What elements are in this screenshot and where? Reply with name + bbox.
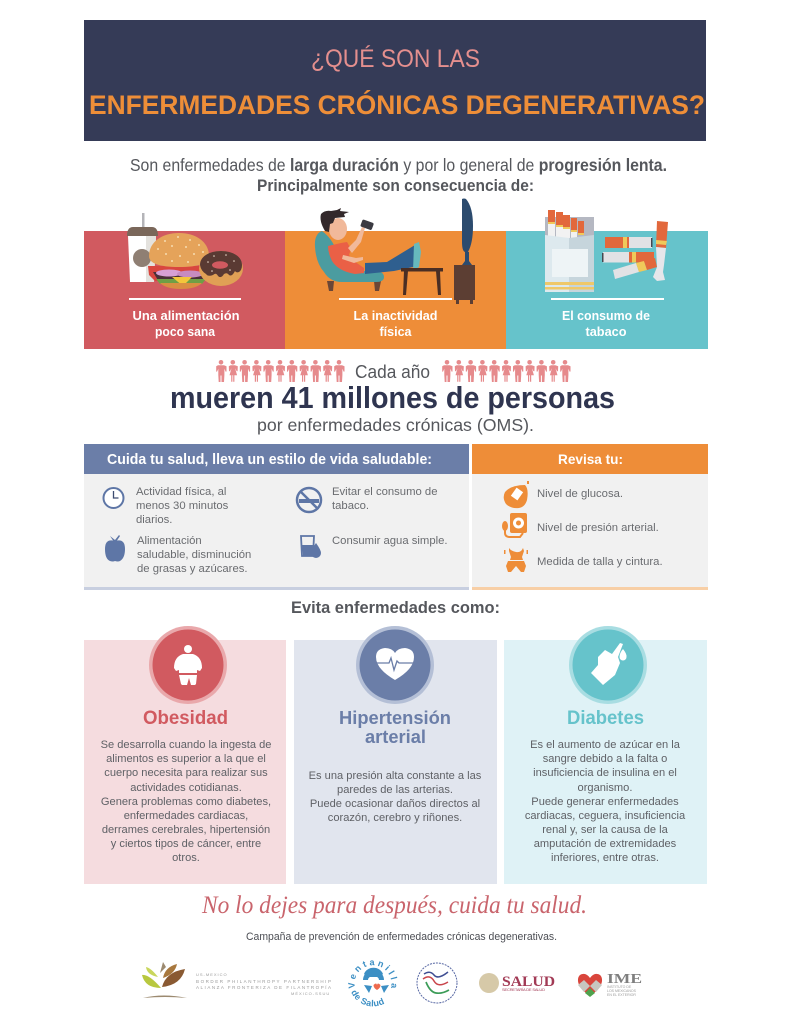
heading: avoid diseases: Evita enfermedades como: — [291, 599, 500, 617]
panel: hypertension — [294, 626, 497, 884]
campaign line: Campaña de prevención de enfermedades crónicas degenerativas. — [246, 931, 557, 943]
panel: check: Revisa tu: — [558, 451, 623, 467]
text: hypertension description: Es una presión alta constante a las — [309, 770, 482, 782]
icon: cigarettes — [545, 210, 668, 292]
text: obesity description: cuerpo necesita para realizar sus — [104, 767, 268, 779]
text: diabetes description: organismo. — [578, 782, 632, 794]
panel: hypertension: arterial — [365, 726, 426, 747]
text: waist: Medida de talla y cintura. — [537, 556, 663, 568]
text: obesity description: actividades cotidianas. — [130, 782, 242, 794]
intro text — [130, 155, 667, 195]
panel: inactivity: La inactividad — [354, 309, 438, 323]
icon: obese person — [149, 626, 227, 704]
text: physical activity: menos 30 minutos — [136, 500, 229, 512]
icon: water glass — [301, 536, 321, 558]
panel: diabetes — [504, 626, 707, 884]
logo: ventanilla de salud: de Salud — [352, 990, 384, 1006]
text: diabetes description: cardiacas, ceguera, insuficiencia — [525, 810, 686, 822]
icon: clock — [104, 488, 124, 508]
text: hypertension description: paredes de las arterias. — [337, 784, 453, 796]
intro text: Son enfermedades de larga duración y por lo general de progresión lenta. — [130, 155, 667, 175]
logo: IME: INSTITUTO DE — [607, 985, 632, 989]
icon: glucose meter — [504, 481, 529, 508]
text: physical activity — [136, 486, 229, 526]
text: diabetes description: insuficiencia de insulina en el — [533, 767, 677, 779]
text: obesity description: Genera problemas como diabetes, — [101, 796, 271, 808]
text: diabetes description: inferiores, entre otras. — [551, 852, 659, 864]
statistic: por enfermedades crónicas (OMS). — [257, 415, 534, 435]
panel: inactivity — [285, 198, 506, 349]
text: obesity description: Se desarrolla cuando la ingesta de — [101, 739, 271, 751]
text: healthy diet: Alimentación — [137, 535, 202, 547]
logo: ventanilla de salud: Ventanilla — [348, 960, 398, 989]
panel: unhealthy food: Una alimentación — [132, 309, 240, 323]
text: healthy diet: saludable, disminución — [137, 549, 251, 561]
logo: IME: EN EL EXTERIOR — [607, 993, 636, 997]
text: diabetes description: Es el aumento de azúcar en la — [530, 739, 681, 751]
text: obesity description: otros. — [172, 852, 200, 864]
slogan: No lo dejes para después, cuida tu salud. — [201, 892, 587, 919]
panel: unhealthy food: poco sana — [155, 325, 216, 339]
logo: border philanthropy partnership — [142, 962, 332, 998]
logo: ventanilla de salud — [348, 960, 398, 1006]
text: healthy diet — [137, 535, 251, 575]
text: hypertension description — [309, 770, 482, 824]
text: hypertension description: Puede ocasionar daños directos al — [310, 798, 480, 810]
panel: check — [472, 444, 708, 590]
text: physical activity: diarios. — [136, 514, 172, 526]
text: obesity description: enfermedades cardiacas, — [124, 810, 248, 822]
panel: healthy lifestyle: Cuida tu salud, lleva un estilo de vida saludable: — [107, 452, 432, 468]
logo: IME: IME — [607, 972, 642, 987]
text: obesity description — [101, 739, 271, 864]
text: avoid tobacco: Evitar el consumo de — [332, 486, 438, 498]
panel: unhealthy food — [84, 213, 285, 349]
text: obesity description: derrames cerebrales, hipertensión — [102, 824, 270, 836]
logo: border philanthropy partnership: MÉXICO-SSUU — [291, 991, 330, 996]
intro text: Principalmente son consecuencia de: — [257, 177, 534, 195]
icon: heart with pulse — [356, 626, 434, 704]
logo: salud — [479, 973, 555, 993]
text: diabetes description: sangre debido a la falta o — [543, 753, 667, 765]
text: blood pressure: Nivel de presión arterial. — [537, 522, 659, 534]
logo: border philanthropy partnership: US-MEXICO — [196, 972, 228, 977]
icon: apple — [105, 535, 125, 562]
text: glucose: Nivel de glucosa. — [537, 488, 623, 500]
panel: tobacco: El consumo de — [562, 309, 650, 323]
icon: man on chair watching TV — [315, 198, 475, 304]
logo: IME: LOS MEXICANOS — [607, 989, 637, 993]
icon: no smoking — [297, 488, 321, 512]
statistic — [170, 362, 615, 435]
title banner — [84, 20, 706, 141]
text: diabetes description: amputación de extremidades — [534, 838, 677, 850]
statistic: mueren 41 millones de personas — [170, 381, 615, 415]
icon: blood pressure monitor — [502, 513, 527, 537]
panel: obesity — [84, 626, 286, 884]
text: diabetes description: Puede generar enfermedades — [531, 796, 679, 808]
icon: finger with blood drop — [569, 626, 647, 704]
text: avoid tobacco: tabaco. — [332, 500, 369, 512]
text: healthy diet: de grasas y azúcares. — [137, 563, 248, 575]
text: diabetes description: renal y, ser la causa de la — [542, 824, 669, 836]
text: obesity description: y ciertos tipos de cáncer, entre — [111, 838, 261, 850]
text: diabetes description — [525, 739, 686, 864]
text: avoid tobacco — [332, 486, 438, 512]
panel: healthy lifestyle — [84, 444, 469, 590]
logo: border philanthropy partnership: BORDER PHILANTHROPY PARTNERSHIP — [196, 979, 332, 984]
panel: inactivity: física — [380, 325, 413, 339]
icon: people right — [442, 360, 570, 382]
icon: people left — [216, 360, 344, 382]
logo: wave circle — [417, 963, 457, 1003]
icon: fast food — [127, 213, 243, 289]
panel: diabetes: Diabetes — [567, 708, 644, 729]
icon: waist measure — [504, 548, 528, 572]
panel: tobacco — [506, 210, 708, 349]
logo: salud: SECRETARÍA DE SALUD — [502, 987, 545, 992]
logo: border philanthropy partnership: ALIANZA FRONTERIZA DE FILANTROPÍA — [196, 984, 332, 990]
title banner: ENFERMEDADES CRÓNICAS DEGENERATIVAS? — [89, 89, 705, 120]
text: drink water: Consumir agua simple. — [332, 535, 448, 547]
logo: salud: SALUD — [502, 974, 555, 990]
text: physical activity: Actividad física, al — [136, 486, 226, 498]
panel: hypertension: Hipertensión — [339, 707, 451, 728]
statistic: Cada año — [355, 362, 430, 382]
text: obesity description: alimentos es superior a la que el — [106, 753, 266, 765]
panel: tobacco: tabaco — [586, 325, 627, 339]
text: hypertension description: corazón, cerebro y riñones. — [328, 812, 462, 824]
panel: obesity: Obesidad — [143, 708, 228, 729]
title banner: ¿QUÉ SON LAS — [311, 44, 480, 73]
logo: IME — [578, 972, 642, 997]
